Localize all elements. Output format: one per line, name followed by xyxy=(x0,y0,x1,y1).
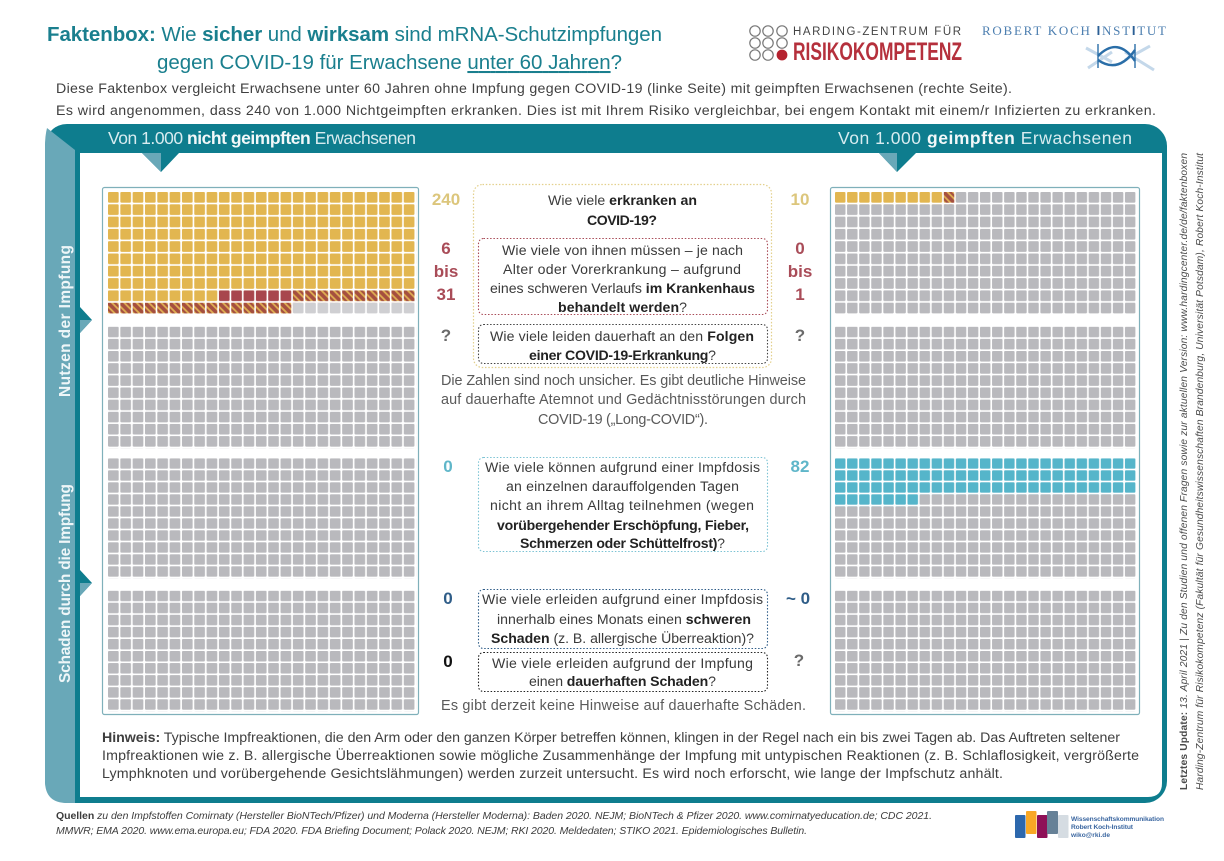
note: long COVID uncertainty: COVID-19 („Long-COVID“). xyxy=(538,412,708,428)
heading: unvaccinated: Von 1.000 nicht geimpften Erwachsenen xyxy=(108,128,416,148)
question: hospital: Alter oder Vorerkrankung – aufgrund xyxy=(503,261,741,277)
chart: unvaccinated icon array xyxy=(102,188,418,714)
numbers: hospital: bis xyxy=(788,262,812,281)
side pointer harm xyxy=(80,570,92,596)
question: hospital: behandelt werden? xyxy=(558,299,687,315)
note: no permanent harm: Es gibt derzeit keine Hinweise auf dauerhafte Schäden. xyxy=(441,698,806,714)
note: long COVID uncertainty: Die Zahlen sind noch unsicher. Es gibt deutliche Hinweise xyxy=(441,373,806,389)
numbers: hospital: 1 xyxy=(795,285,805,304)
question: long COVID xyxy=(478,324,768,364)
heading: vaccinated: Von 1.000 geimpften Erwachsenen xyxy=(838,128,1132,148)
title: gegen COVID-19 für Erwachsene unter 60 Jahren? xyxy=(157,51,622,74)
note: long COVID uncertainty: auf dauerhafte Atemnot und Gedächtnisstörungen durch xyxy=(441,392,806,408)
question: hospital: eines schweren Verlaufs im Krankenhaus xyxy=(490,280,755,296)
chart: vaccinated icon array xyxy=(830,188,1140,714)
numbers: permanent harm xyxy=(443,651,804,671)
logo: Harding-Zentrum für Risikokompetenz: RISIKOKOMPETENZ xyxy=(793,38,962,66)
numbers: COVID-19 cases xyxy=(432,190,809,209)
numbers: long COVID: ? xyxy=(441,326,451,345)
numbers: serious harm: 0 xyxy=(443,589,453,608)
logo: Robert Koch Institut: ROBERT KOCH INSTITUT xyxy=(982,23,1166,38)
note: long COVID uncertainty xyxy=(441,373,806,428)
note: Hinweis xyxy=(102,730,1139,782)
numbers: COVID-19 cases: 240 xyxy=(432,190,460,209)
note: Hinweis: Lymphknoten und vorübergehende Gesichtslähmungen) werden zurzeit untersucht. Es wird noch erforscht, wie lange der Impfschutz anhält. xyxy=(102,766,1003,782)
question panel: benefit xyxy=(474,184,772,368)
question: serious harm xyxy=(478,590,768,648)
logo: Wissenschaftskommunikation: wiko@rki.de xyxy=(1070,832,1110,839)
side label: benefit: Nutzen der Impfung xyxy=(57,245,74,397)
note: Hinweis: Impfreaktionen wie z. B. allergische Überreaktionen sowie mögliche Zusammenhänge der Impfung mit untypischen Reaktionen (z. B. Schlaflosigkeit, vergrößerte xyxy=(102,746,1139,764)
intro text xyxy=(56,81,1156,119)
block: COVID-19 cases unvaccinated, 240 xyxy=(108,192,416,315)
question: side effects: Schmerzen oder Schüttelfrost)? xyxy=(520,535,725,551)
logo: Harding-Zentrum für Risikokompetenz xyxy=(750,26,962,66)
block: long COVID unvaccinated xyxy=(108,327,416,448)
note: Hinweis: Hinweis: Typische Impfreaktionen, die den Arm oder den ganzen Körper betreffen können, klingen in der Regel nach ein bis zwei Tagen ab. Das Auftreten seltener xyxy=(102,730,1120,746)
numbers: hospital: bis xyxy=(434,262,458,281)
logo: Wissenschaftskommunikation: Wissenschaftskommunikation xyxy=(1071,816,1164,823)
numbers: hospital xyxy=(434,239,812,304)
block: long COVID vaccinated xyxy=(835,327,1137,448)
question: serious harm: Schaden (z. B. allergische Überreaktion)? xyxy=(491,629,754,646)
sources: MMWR; EMA 2020. www.ema.europa.eu; FDA 2020. FDA Briefing Document; Polack 2020. NEJM; RKI 2020. Meldedaten; STIKO 2021. Epidemiologisches Bulletin. xyxy=(56,825,807,837)
vertical note: last update: Letztes Update: 13. April 2021 | Zu den Studien und offenen Fragen sowie zur aktuellen Version: www.hardingcenter.de/de/faktenboxen xyxy=(1179,153,1190,790)
question: serious harm: Wie viele erleiden aufgrund einer Impfdosis xyxy=(482,591,763,607)
logo: Robert Koch Institut xyxy=(982,23,1166,70)
numbers: side effects xyxy=(443,457,809,476)
block: COVID-19 cases vaccinated, 10 xyxy=(835,192,1137,315)
logo: Harding-Zentrum für Risikokompetenz: HARDING-ZENTRUM FÜR xyxy=(793,26,961,38)
question: long COVID: Wie viele leiden dauerhaft an den Folgen xyxy=(490,328,754,344)
question: side effects: Wie viele können aufgrund einer Impfdosis xyxy=(485,459,760,475)
sources: Quellen zu den Impfstoffen Comirnaty (Hersteller BioNTech/Pfizer) und Moderna (Hersteller Moderna): Baden 2020. NEJM; BioNTech & Pfizer 2020. www.comirnatyeducation.de; CDC 2021. xyxy=(56,810,932,822)
question: permanent harm: einen dauerhaften Schaden? xyxy=(529,673,716,689)
question: serious harm: innerhalb eines Monats einen schweren xyxy=(497,611,751,627)
numbers: hospital: 31 xyxy=(437,285,455,304)
vertical note: authors: Harding-Zentrum für Risikokompetenz (Fakultät für Gesundheitswissenschaften Brandenburg, Universität Potsdam), Robert Koch-Institut xyxy=(1195,152,1206,790)
title: Faktenbox: Wie sicher und wirksam sind mRNA-Schutzimpfungen xyxy=(47,23,662,46)
intro text: Es wird angenommen, dass 240 von 1.000 Nichtgeimpften erkranken. Dies ist mit Ihrem Risiko vergleichbar, bei engem Kontakt mit einem/r Infizierten zu erkranken. xyxy=(56,103,1156,119)
numbers: COVID-19 cases: 10 xyxy=(791,190,809,209)
numbers: serious harm xyxy=(443,589,810,608)
block: serious harm unvaccinated xyxy=(108,591,416,711)
question: COVID-19 cases xyxy=(548,192,697,228)
logo: Wissenschaftskommunikation xyxy=(1015,811,1164,839)
top pointer right xyxy=(879,153,916,172)
question: side effects xyxy=(478,458,768,552)
block: side effects vaccinated, 82 xyxy=(835,458,1137,578)
question: hospital xyxy=(478,238,768,315)
numbers: permanent harm: ? xyxy=(794,651,804,670)
question: permanent harm xyxy=(478,652,768,692)
question: COVID-19 cases: COVID-19? xyxy=(587,212,657,228)
numbers: hospital: 0 xyxy=(795,239,805,258)
question: permanent harm: Wie viele erleiden aufgrund der Impfung xyxy=(492,655,753,671)
numbers: long COVID xyxy=(441,326,805,345)
question: long COVID: einer COVID-19-Erkrankung? xyxy=(529,347,716,363)
block: side effects unvaccinated xyxy=(108,458,416,578)
numbers: permanent harm: 0 xyxy=(443,652,453,671)
block: serious harm vaccinated xyxy=(835,591,1137,711)
numbers: hospital: 6 xyxy=(441,239,451,258)
side label: harm: Schaden durch die Impfung xyxy=(57,484,74,683)
question: COVID-19 cases: Wie viele erkranken an xyxy=(548,192,697,208)
top pointer left xyxy=(142,153,179,172)
numbers: serious harm: ~ 0 xyxy=(786,589,810,608)
logo: Wissenschaftskommunikation: Robert Koch-Institut xyxy=(1071,824,1134,831)
question: side effects: vorübergehender Erschöpfung, Fieber, xyxy=(497,517,749,533)
question: hospital: Wie viele von ihnen müssen – je nach xyxy=(502,242,743,258)
sources xyxy=(56,810,932,837)
numbers: side effects: 0 xyxy=(443,457,453,476)
numbers: side effects: 82 xyxy=(791,457,809,476)
frame panel xyxy=(45,124,1167,803)
question: side effects: nicht an ihrem Alltag teilnehmen (wegen xyxy=(490,497,754,513)
title xyxy=(47,23,662,74)
numbers: long COVID: ? xyxy=(795,326,805,345)
question: side effects: an einzelnen darauffolgenden Tagen xyxy=(506,478,739,494)
side pointer benefit xyxy=(80,307,92,333)
intro text: Diese Faktenbox vergleicht Erwachsene unter 60 Jahren ohne Impfung gegen COVID-19 (linke Seite) mit geimpften Erwachsenen (rechte Seite). xyxy=(56,81,1012,97)
